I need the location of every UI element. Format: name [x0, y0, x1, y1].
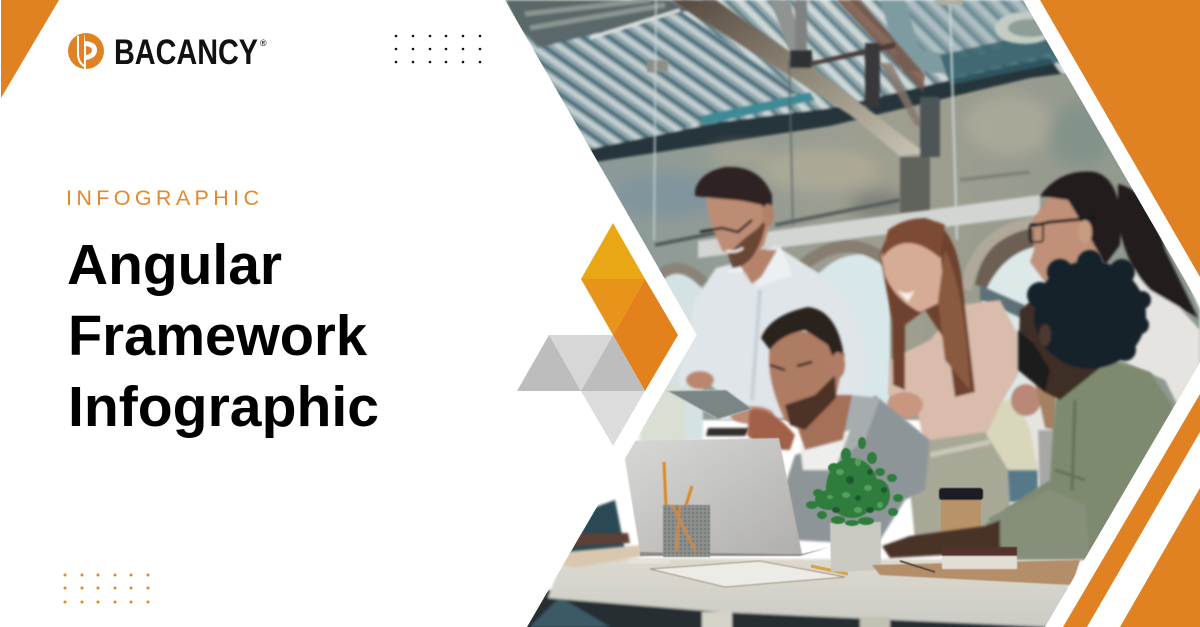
coffee cup: [939, 488, 983, 532]
person: man with afro in olive shirt: [882, 250, 1172, 560]
person: seated man in grey blazer: [747, 307, 930, 542]
photo background: steel beam and posts: [647, 0, 1055, 240]
photo: team around laptop: [500, 0, 1200, 627]
triangle mosaic icon: [517, 223, 678, 446]
laptop: [622, 438, 830, 556]
folders and book on table: [872, 547, 1080, 585]
photo background: ledge: [698, 195, 1040, 258]
table and under-table shadow: [520, 500, 1080, 627]
pencil on table: [811, 566, 848, 574]
dot grid: black: [395, 35, 481, 63]
person: woman with long auburn hair: [880, 218, 1018, 540]
photo background: ceiling: [500, 0, 1120, 170]
title: Infographic: [68, 375, 379, 439]
title: Framework: [68, 304, 367, 368]
orange corner triangle top left: [1, 0, 59, 98]
tablet: [668, 390, 752, 419]
logo mark: [68, 33, 104, 69]
dot grid: orange: [64, 574, 150, 604]
pen holder with pencils: [663, 462, 710, 557]
person: standing man with tablet: [680, 165, 820, 438]
papers left of laptop: [562, 533, 650, 568]
title: Angular: [67, 233, 282, 297]
potted plant: [806, 437, 903, 572]
person: woman with glasses and ponytail: [1011, 172, 1200, 520]
title: [67, 233, 379, 439]
foliage: [806, 437, 903, 526]
pot: [830, 522, 881, 572]
notebook on table: [650, 561, 845, 587]
marker: [628, 560, 670, 563]
photo background: arched windows: [640, 222, 1048, 502]
logo: Bacancy: [68, 33, 267, 72]
orange corner bottom right: [1120, 488, 1200, 627]
registered mark: ®: [260, 38, 267, 48]
orange stripe bottom right: [1063, 394, 1200, 627]
eyebrow label: INFOGRAPHIC: [66, 186, 259, 210]
photo background: brick wall: [595, 72, 1200, 420]
orange panel top right: [1040, 0, 1200, 277]
logo wordmark: BACANCY: [114, 33, 258, 72]
